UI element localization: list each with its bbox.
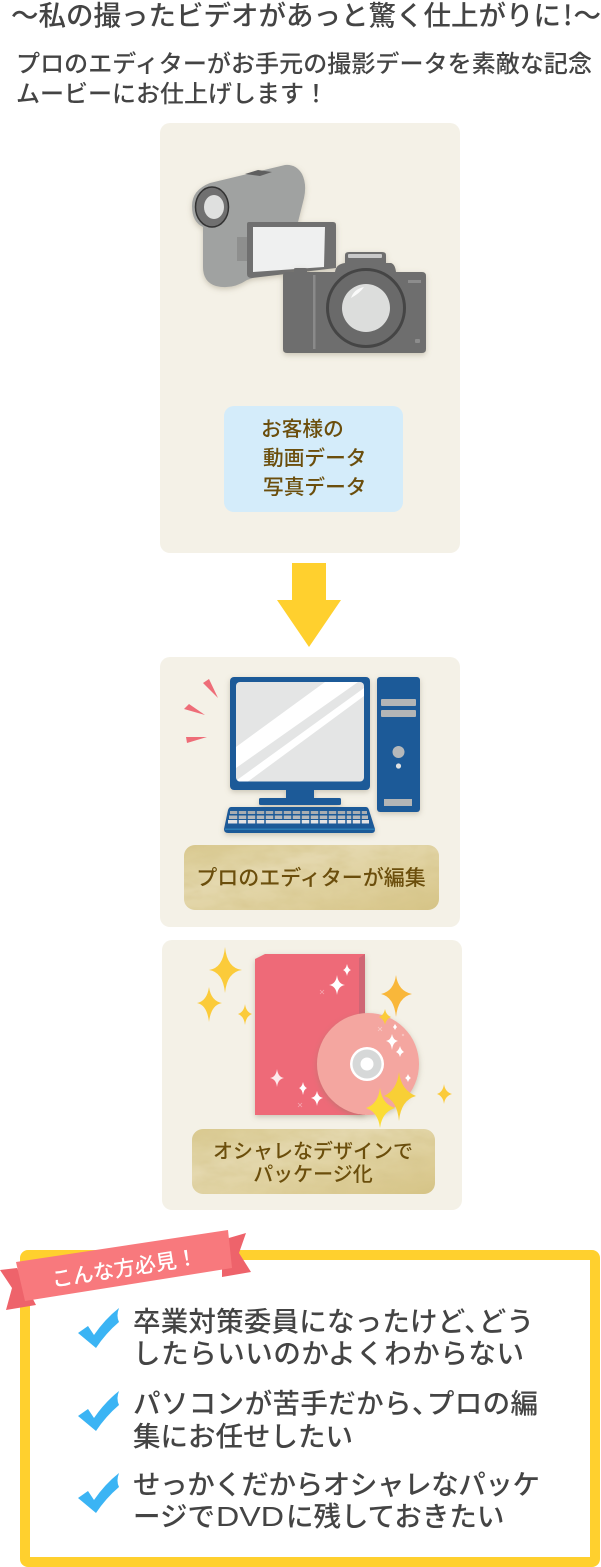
ribbon heading: [0, 1230, 251, 1310]
checklist item 3: [78, 1469, 540, 1532]
label: editing: プロのエディターが編集: [196, 866, 426, 890]
panel: editing: [160, 657, 460, 927]
checklist item 1: したらいいのかよくわからない: [133, 1338, 524, 1369]
arrow: [277, 563, 341, 647]
icon: check mark: [78, 1308, 119, 1348]
panel: packaging: [162, 940, 462, 1210]
panel: recommended for: [0, 1230, 595, 1562]
checklist item 1: [78, 1306, 534, 1369]
icon: gold sparkles: [197, 947, 452, 1128]
label: customer data: お客様の: [261, 418, 344, 441]
checklist item 3: に残しておきたい: [286, 1501, 504, 1532]
label: customer data: [224, 406, 403, 512]
label: customer data: 写真データ: [263, 475, 366, 499]
icon: white sparkles: [270, 964, 411, 1107]
intro text: [16, 50, 592, 108]
icon: video camera: [192, 165, 336, 287]
label: packaging: [192, 1129, 435, 1194]
icon: photo camera: [283, 252, 426, 353]
checklist item 3: ージで: [133, 1501, 215, 1532]
icon: disc: [317, 1013, 419, 1115]
label: packaging: パッケージ化: [253, 1163, 373, 1186]
checklist item 3: DVD: [216, 1501, 284, 1532]
icon: check mark: [78, 1473, 119, 1513]
icon: emphasis marks: [184, 679, 218, 743]
intro text: ムービーにお仕上げします！: [16, 81, 328, 108]
icon: check mark: [78, 1391, 119, 1431]
checklist item 2: パソコンが苦手だから、プロの編: [133, 1388, 538, 1419]
checklist item 1: 卒業対策委員になったけど、どう: [133, 1306, 534, 1337]
label: packaging: オシャレなデザインで: [213, 1139, 413, 1163]
label: editing: [184, 845, 439, 910]
panel: customer data: [160, 123, 460, 553]
icon: desktop computer: [224, 677, 420, 833]
icon: dvd case: [255, 954, 365, 1115]
checklist item 2: 集にお任せしたい: [133, 1421, 353, 1452]
intro text: プロのエディターがお手元の撮影データを素敵な記念: [16, 50, 592, 78]
checklist item 2: [78, 1388, 538, 1452]
checklist item 3: せっかくだからオシャレなパッケ: [133, 1469, 540, 1500]
label: customer data: 動画データ: [263, 446, 366, 470]
ribbon heading: こんな方必見！: [50, 1246, 199, 1292]
